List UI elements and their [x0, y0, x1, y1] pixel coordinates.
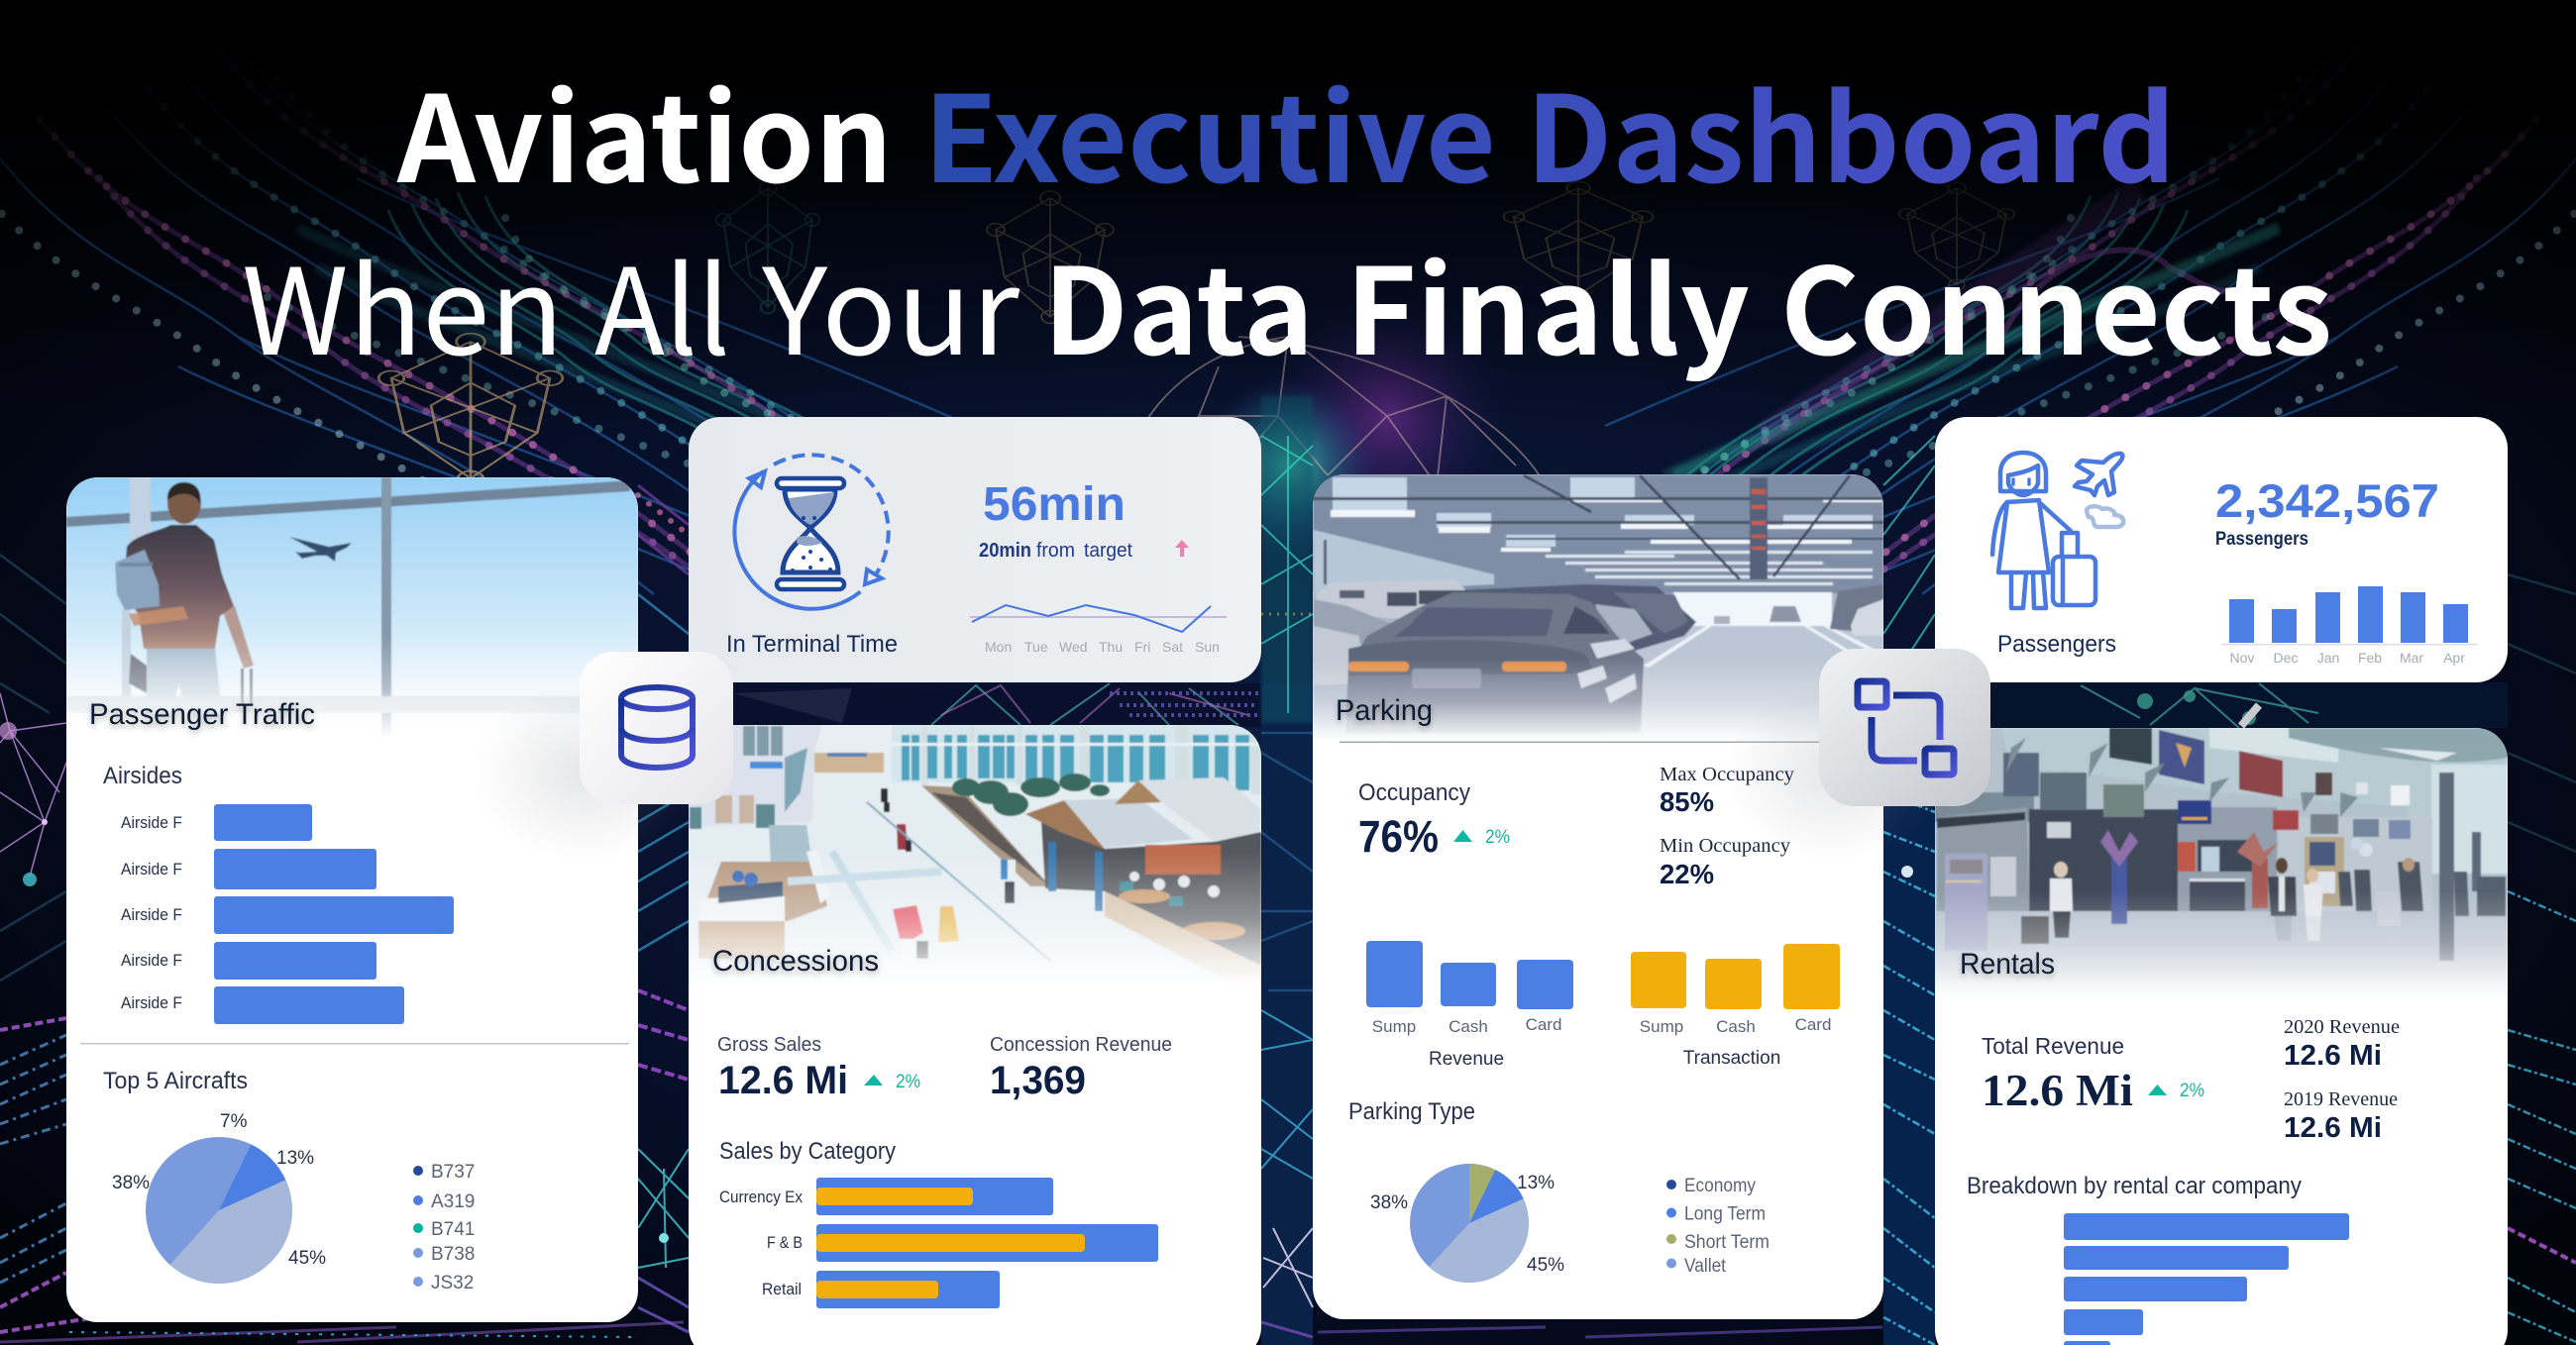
metric: 2019 revenue [2284, 1088, 2398, 1144]
pie chart: parking type [1370, 1164, 1564, 1283]
bar chart: airsides: Airside F [121, 860, 182, 879]
metric: concession revenue: 1,369 [990, 1059, 1086, 1102]
photo: traveller at window [66, 477, 638, 737]
line chart: weekly: Mon [985, 639, 1012, 655]
photo: parking garage [1313, 474, 1883, 742]
bar chart: transaction: Transaction [1683, 1048, 1780, 1069]
line chart: weekly: Wed [1059, 639, 1088, 655]
panel: passenger traffic [66, 477, 694, 1322]
bar chart: airsides: Airside F [121, 993, 182, 1012]
metric: 2020 revenue: 2020 Revenue [2284, 1016, 2400, 1038]
legend: aircraft types: B737 [431, 1162, 475, 1183]
bar chart: monthly passengers: Apr [2443, 650, 2465, 666]
bar chart: transaction: Sump [1640, 1017, 1683, 1036]
metric: total revenue: 12.6 Mi [1982, 1066, 2133, 1115]
legend: aircraft types: B741 [431, 1219, 475, 1240]
heading: parking: Parking [1336, 694, 1433, 727]
metric: max occupancy: Max Occupancy [1660, 764, 1794, 785]
bar chart: monthly passengers: Feb [2358, 650, 2382, 666]
line chart: weekly: Fri [1134, 639, 1150, 655]
title line 2: When [242, 216, 564, 389]
bar chart: revenue: Revenue [1429, 1049, 1504, 1070]
gutter between first columns [638, 485, 689, 574]
left wall [1314, 530, 1494, 594]
metric: gross sales [717, 1034, 920, 1102]
SUV [1316, 579, 1472, 619]
line chart: weekly: Tue [1024, 639, 1048, 655]
pie chart: parking type: 45% [1527, 1255, 1564, 1276]
pie chart: parking type: 38% [1370, 1192, 1408, 1213]
row of cars [1456, 584, 1696, 654]
purple arch [2001, 250, 2239, 337]
title line 2: Connects [1780, 216, 2332, 389]
globe mesh [1120, 297, 1546, 555]
bar chart: revenue: Cash [1449, 1017, 1488, 1036]
title line 2: Your [761, 216, 1020, 389]
panel: in terminal time [689, 417, 1261, 682]
jeans [146, 648, 220, 696]
gutter right [1883, 683, 1935, 1345]
bar chart: sales by category: Currency Ex [719, 1188, 803, 1206]
hexagon nets [378, 181, 2014, 485]
head [166, 492, 202, 525]
bar chart: revenue [1366, 941, 1573, 1070]
pillar and people [2439, 773, 2454, 961]
backpack [115, 550, 160, 610]
bar chart: monthly passengers [2221, 586, 2478, 666]
metric: occupancy: 76% [1358, 811, 1439, 862]
legend: parking types: Economy [1684, 1176, 1756, 1196]
metric: total revenue: 2% [2180, 1081, 2204, 1101]
bar chart: monthly passengers: Nov [2230, 650, 2254, 666]
right edge [2508, 574, 2576, 852]
title line 1 [396, 44, 2176, 217]
photo: airport concourse [689, 725, 1261, 986]
legend: parking types: Short Term [1684, 1232, 1770, 1253]
pie chart: top aircrafts: 13% [276, 1148, 314, 1169]
pie chart: top aircrafts: 45% [288, 1248, 326, 1269]
pie chart: parking type: 13% [1517, 1173, 1555, 1193]
bar chart: revenue: Card [1526, 1015, 1561, 1034]
left edge [0, 555, 66, 981]
metric note: 20min from target: target [1084, 540, 1132, 562]
right arm [220, 604, 254, 669]
heading: rentals: Rentals [1960, 948, 2055, 981]
lower side textures [0, 396, 2576, 1345]
title line 1: Dashboard [1526, 44, 2176, 217]
metric: concession revenue [990, 1034, 1172, 1102]
body [123, 525, 234, 649]
metric: occupancy [1358, 779, 1510, 862]
metric: 56min: 56min [983, 478, 1126, 531]
panel: rentals [1935, 728, 2508, 1345]
bar chart: sales by category: Retail [762, 1280, 802, 1298]
bottom under parking [1318, 1327, 1882, 1337]
legend: parking types [1666, 1176, 1770, 1277]
title line 2: Finally [1345, 216, 1750, 389]
icon: pink up arrow [1175, 540, 1189, 557]
gutter middle [1261, 683, 1313, 1345]
label: in terminal time: In Terminal Time [726, 631, 898, 658]
subheading: parking type: Parking Type [1348, 1098, 1475, 1125]
title line 1: Aviation [396, 44, 893, 217]
title line 2 [242, 216, 2332, 389]
metric: max occupancy: 85% [1660, 786, 1714, 817]
pie chart: top aircrafts: 7% [220, 1111, 248, 1132]
plane [289, 537, 352, 562]
bar chart: transaction: Card [1795, 1015, 1831, 1034]
legend: aircraft types: A319 [431, 1191, 475, 1212]
left wall [689, 725, 822, 827]
metric: gross sales: Gross Sales [717, 1034, 821, 1056]
upper wall [2003, 729, 2507, 816]
legend: aircraft types: JS32 [431, 1273, 474, 1293]
metric: gross sales: 2% [896, 1072, 920, 1092]
bar chart: monthly passengers: Mar [2400, 650, 2423, 666]
line chart: weekly: Sat [1162, 639, 1183, 655]
heading: passenger traffic: Passenger Traffic [89, 698, 315, 731]
left kiosk [769, 825, 812, 865]
metric: occupancy: 2% [1485, 827, 1510, 848]
title line 2: Data [1043, 216, 1314, 389]
lower dark zone [1937, 807, 2029, 916]
metric: max occupancy [1660, 764, 1794, 817]
ceiling light patches [1333, 477, 1873, 547]
bar chart: rental car companies [2064, 1213, 2349, 1345]
metric: occupancy: Occupancy [1358, 779, 1470, 806]
metric note: 20min from target: 20min [979, 540, 1031, 562]
gap: under terminal time [733, 683, 1261, 727]
hanging signs [2003, 753, 2039, 796]
bar chart: monthly passengers: Dec [2274, 650, 2298, 666]
bar chart: airsides: Airside F [121, 813, 182, 832]
panel: passengers [1935, 417, 2508, 682]
metric: passengers total: 2,342,567 [2215, 474, 2439, 527]
bar chart: airsides [121, 804, 454, 1024]
pie chart: top aircrafts [112, 1111, 326, 1284]
metric: total revenue [1982, 1033, 2204, 1115]
metric: 2019 revenue: 12.6 Mi [2284, 1112, 2382, 1144]
subheading: sales by category: Sales by Category [719, 1138, 896, 1165]
icon: traveller with suitcase and plane [1992, 453, 2123, 608]
metric: min occupancy: Min Occupancy [1660, 835, 1790, 857]
bar chart: airsides: Airside F [121, 951, 182, 970]
right cars [1830, 584, 1883, 634]
metric: 2020 revenue: 12.6 Mi [2284, 1040, 2382, 1072]
back wall and floor [1673, 592, 1832, 626]
metric: passengers total: Passengers [2215, 529, 2308, 550]
people [893, 905, 923, 939]
metric: min occupancy: 22% [1660, 859, 1714, 889]
label: passengers: Passengers [1997, 631, 2116, 658]
metric note: 20min from target: from [1036, 540, 1075, 562]
subheading: top 5 aircrafts: Top 5 Aircrafts [103, 1068, 248, 1094]
windows [892, 725, 1261, 782]
legend: parking types: Vallet [1684, 1256, 1727, 1277]
bar chart: monthly passengers: Jan [2317, 650, 2339, 666]
panel: parking [1313, 474, 1942, 1319]
subheading: breakdown by rental car company: Breakdown by rental car company [1967, 1173, 2302, 1199]
left cars [1314, 599, 1389, 644]
bar chart: transaction: Cash [1716, 1017, 1756, 1036]
heading: concessions: Concessions [712, 945, 879, 978]
photo: rental car counters [1935, 728, 2508, 997]
bar chart: sales by category: F & B [767, 1233, 803, 1252]
bar chart: sales by category [719, 1178, 1158, 1308]
gap: under passengers [1990, 682, 2508, 728]
metric: passengers total [2215, 474, 2439, 550]
legend: parking types: Long Term [1684, 1204, 1766, 1224]
title [242, 44, 2332, 389]
stalls and palms [921, 785, 1050, 886]
metric: total revenue: Total Revenue [1982, 1033, 2124, 1059]
floor [1936, 910, 2271, 917]
metric: 2020 revenue [2284, 1016, 2400, 1072]
title line 1: Executive [923, 44, 1496, 217]
icon: hourglass with cycle arrows [734, 455, 889, 609]
metric: gross sales: 12.6 Mi [718, 1059, 848, 1102]
line chart: weekly [970, 605, 1227, 655]
line chart: weekly: Thu [1099, 639, 1123, 655]
metric note: 20min from target [979, 540, 1132, 562]
metric: min occupancy [1660, 835, 1790, 889]
line chart: weekly: Sun [1195, 639, 1220, 655]
Alamo sign [1945, 854, 1987, 951]
legend: aircraft types: B738 [431, 1244, 475, 1265]
bar chart: transaction [1631, 944, 1840, 1069]
pie chart: top aircrafts: 38% [112, 1173, 150, 1193]
metric: 2019 revenue: 2019 Revenue [2284, 1088, 2398, 1110]
legend: aircraft types [413, 1162, 475, 1293]
subheading: airsides: Airsides [103, 763, 182, 789]
metric: concession revenue: Concession Revenue [990, 1034, 1172, 1056]
icon tile: database [580, 652, 733, 804]
icon tile: connected nodes [1819, 649, 1990, 806]
bar chart: revenue: Sump [1372, 1017, 1416, 1036]
title line 2: All [594, 216, 730, 389]
big car [1345, 592, 1644, 733]
panel: concessions [689, 725, 1261, 1345]
bar chart: airsides: Airside F [121, 905, 182, 924]
